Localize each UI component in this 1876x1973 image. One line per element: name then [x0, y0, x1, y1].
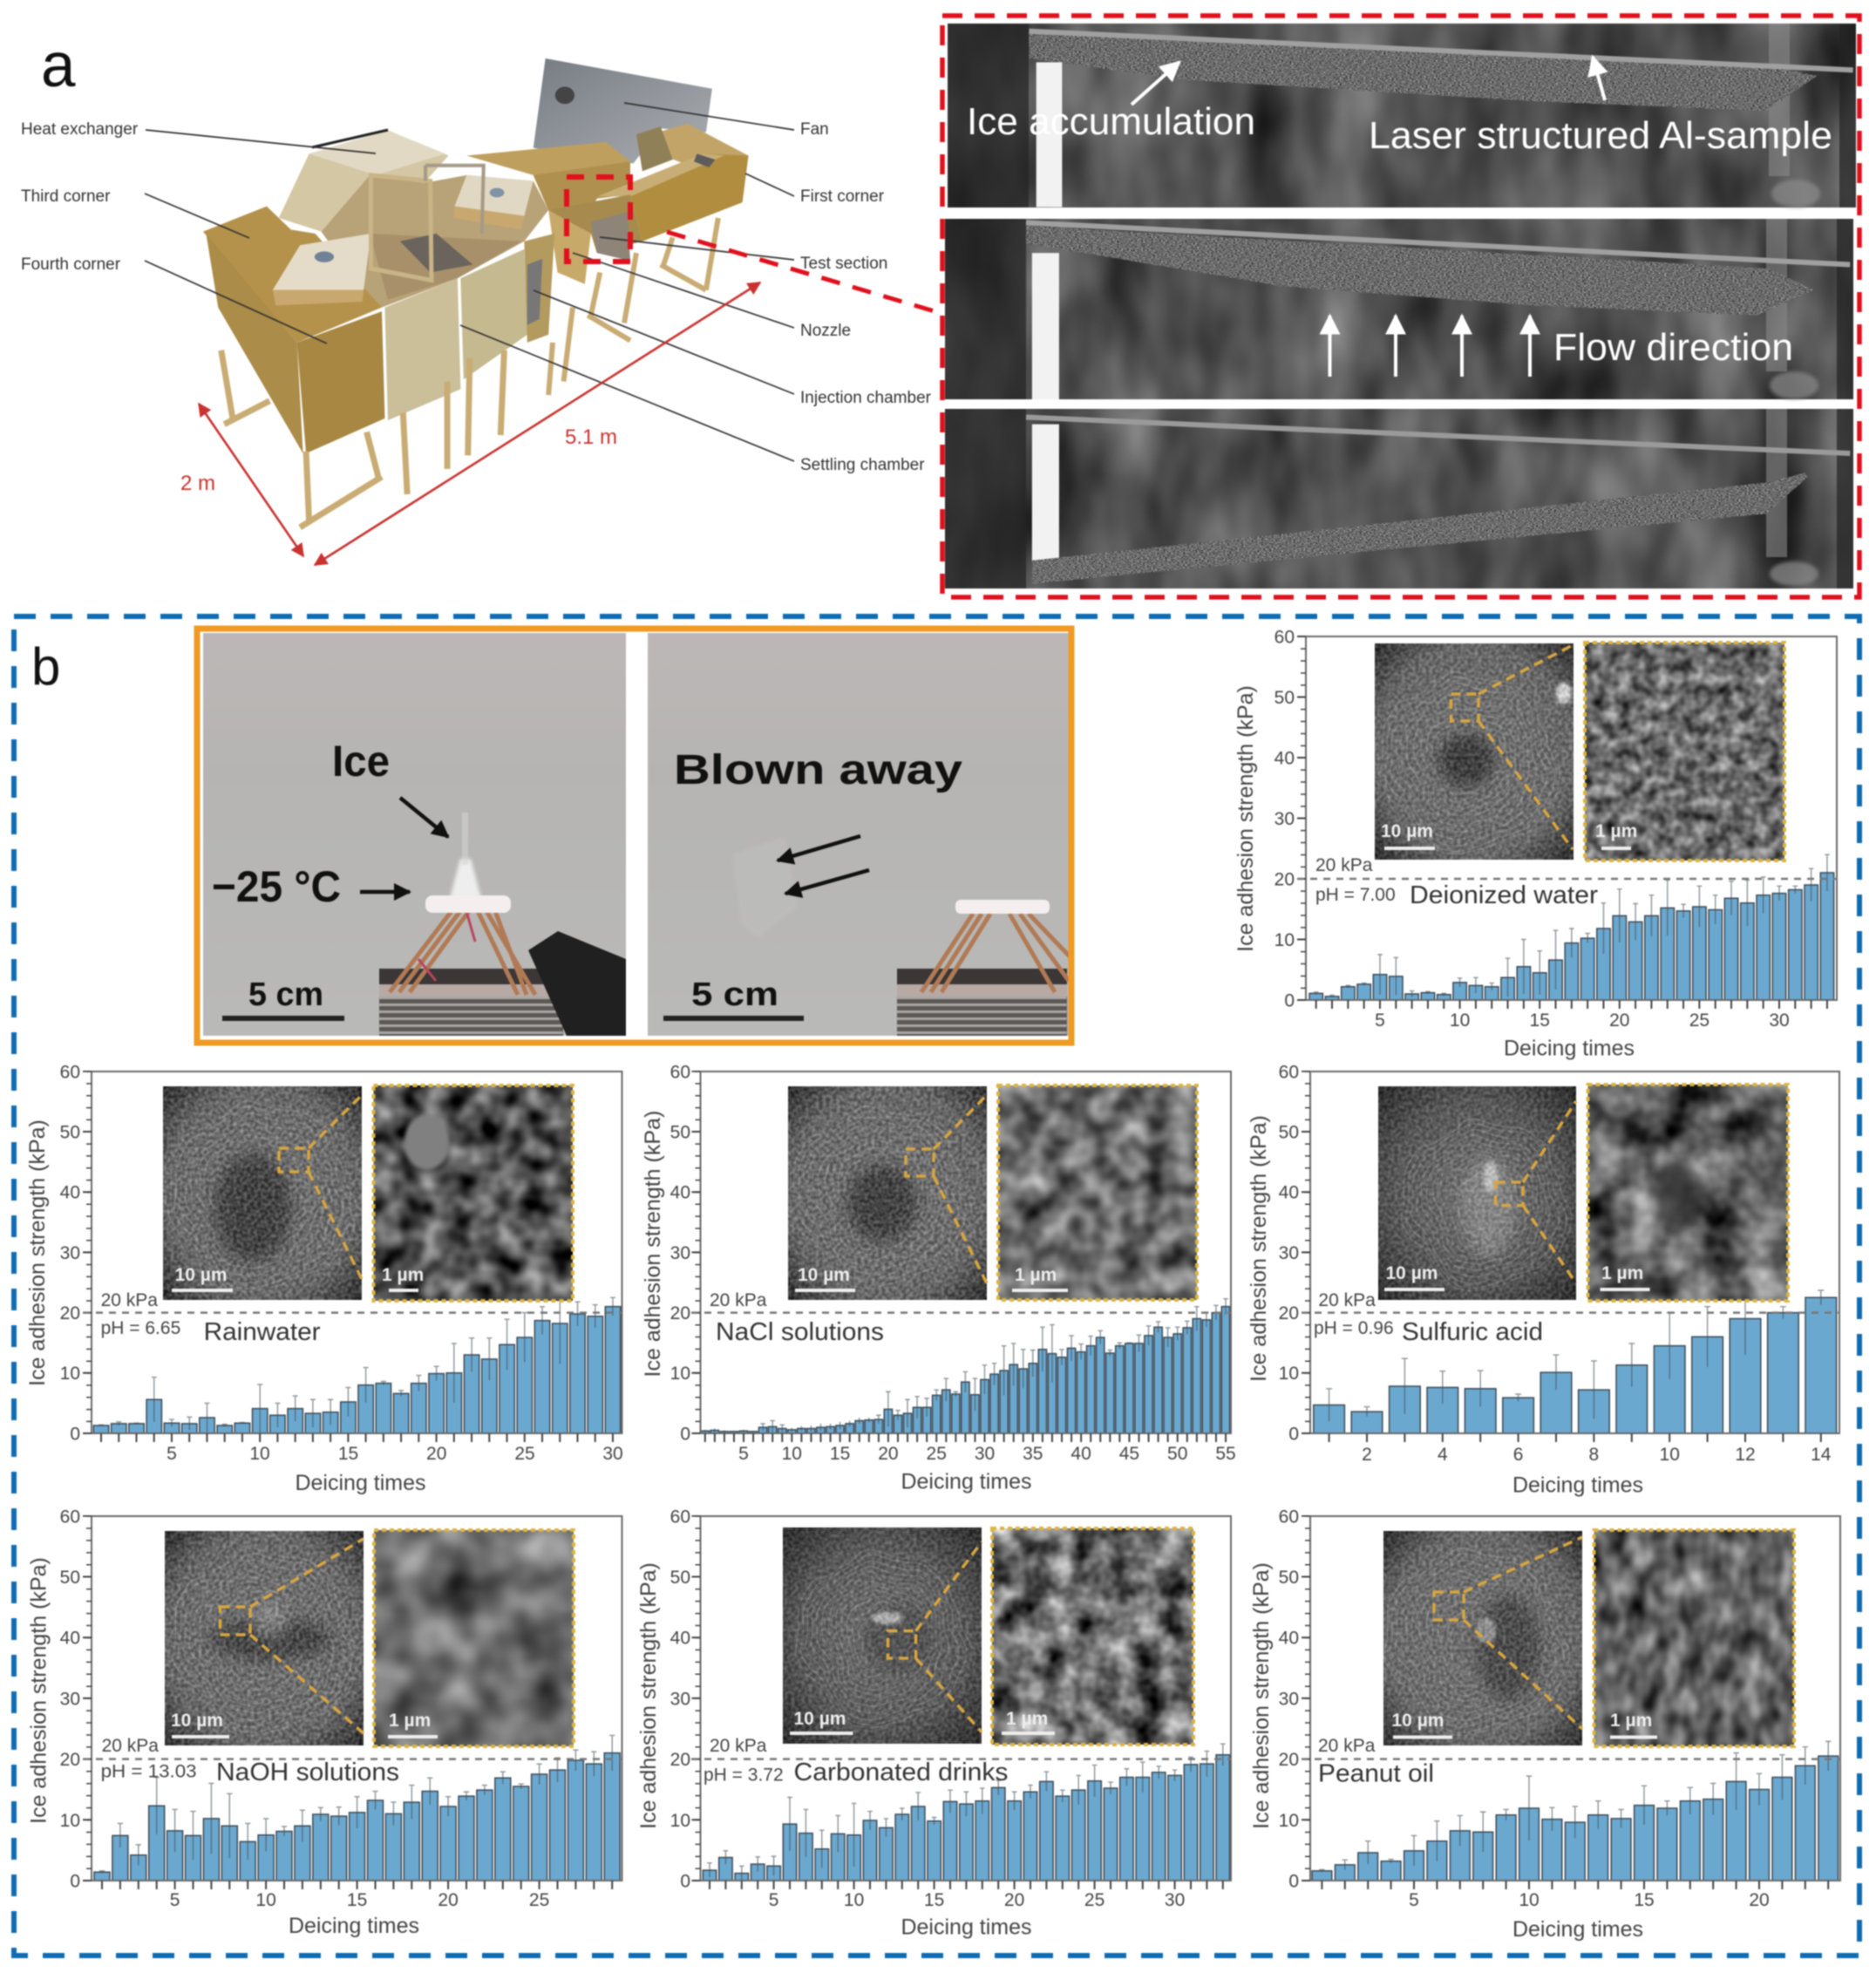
x tick labels: [1375, 1010, 1790, 1031]
x tick labels: 40: [1071, 1444, 1091, 1464]
y tick labels: 10: [1274, 930, 1295, 950]
annotations: pH = 3.72: [704, 1765, 784, 1786]
SEM overview: [783, 1527, 982, 1744]
x tick labels: [769, 1890, 1185, 1910]
annotations: Peanut oil: [1318, 1760, 1434, 1788]
panel: flow photographs: [945, 24, 1856, 588]
x tick labels: 10: [844, 1890, 864, 1910]
SEM detail: 1 µm: [1015, 1265, 1057, 1285]
SEM detail: [992, 1528, 1193, 1745]
component labels right: Settling chamber: [800, 456, 925, 474]
axes: [691, 1071, 1231, 1438]
axis titles: Ice adhesion strength (kPa): [1247, 1115, 1271, 1382]
SEM detail: [373, 1085, 573, 1301]
x tick labels: 10: [1519, 1890, 1540, 1910]
component labels right: [800, 120, 932, 474]
SEM detail: 1 µm: [382, 1265, 424, 1285]
SEM detail: 1 µm: [1610, 1711, 1652, 1731]
annotations: NaCl solutions: [716, 1318, 884, 1346]
x tick labels: 20: [1749, 1890, 1770, 1910]
label: Ice: Ice: [332, 737, 390, 786]
axis titles: Ice adhesion strength (kPa): [641, 1111, 665, 1377]
axes: [83, 1515, 622, 1885]
SEM overview: 10 µm: [171, 1711, 223, 1731]
SEM detail: [1588, 1085, 1788, 1301]
axis titles: [25, 1119, 426, 1495]
arrow: 2 m dimension: [199, 404, 303, 556]
x tick labels: 15: [1634, 1890, 1655, 1910]
y tick labels: [60, 1507, 80, 1892]
x tick labels: 30: [1165, 1890, 1185, 1910]
SEM overview: [788, 1086, 987, 1300]
y tick labels: [1279, 1507, 1299, 1892]
y tick labels: 40: [60, 1629, 80, 1649]
y tick labels: 10: [60, 1811, 80, 1831]
bars: [703, 1744, 1230, 1881]
axis titles: Deicing times: [1504, 1036, 1635, 1060]
annotations: Deionized water: [1410, 881, 1598, 909]
annotations: [1314, 1290, 1543, 1346]
ice spike: [450, 813, 481, 898]
axis titles: [1249, 1562, 1643, 1942]
x tick labels: 20: [878, 1444, 899, 1464]
illustration: wind tunnel: [203, 58, 749, 527]
annotations: [710, 1290, 884, 1346]
axis titles: Deicing times: [901, 1470, 1032, 1494]
x tick labels: 25: [514, 1444, 535, 1464]
x tick labels: 20: [1004, 1890, 1024, 1910]
axis titles: Ice adhesion strength (kPa): [1234, 685, 1258, 952]
x tick labels: 8: [1589, 1445, 1599, 1465]
dimension label 2 m: 2 m: [180, 472, 215, 495]
label: ice accumulation: Ice accumulation: [967, 100, 1255, 143]
annotations: 20 kPa: [1315, 855, 1373, 875]
x tick labels: 15: [338, 1444, 358, 1464]
SEM detail: 1 µm: [1006, 1709, 1048, 1729]
y tick labels: 50: [670, 1568, 690, 1588]
x tick labels: 30: [602, 1444, 623, 1464]
y tick labels: [670, 1062, 690, 1444]
y tick labels: 60: [1279, 1507, 1299, 1527]
label: temperature: −25 °C: [212, 862, 341, 911]
heat sink left: [379, 895, 626, 1036]
SEM detail: 1 µm: [1595, 821, 1637, 841]
x tick labels: 55: [1215, 1444, 1236, 1464]
chart: Sulfuric acid: [1247, 1062, 1839, 1498]
zoom frame: red dashed: [942, 16, 1859, 597]
y tick labels: 30: [670, 1690, 690, 1709]
leader lines: [145, 103, 794, 461]
bars: [1312, 1741, 1839, 1881]
y tick labels: 60: [670, 1062, 690, 1083]
component labels left: Fourth corner: [21, 255, 121, 274]
bars: [1309, 854, 1834, 1000]
arrow: ice accumulation: [1132, 62, 1179, 105]
x tick labels: 25: [529, 1890, 549, 1910]
axis titles: Deicing times: [1512, 1917, 1643, 1942]
arrow: laser sample: [1593, 57, 1605, 100]
component labels right: Test section: [800, 255, 887, 273]
panel label b: b: [31, 637, 60, 696]
component labels left: Third corner: [21, 187, 111, 206]
y tick labels: 40: [670, 1629, 690, 1649]
x tick labels: [738, 1444, 1236, 1464]
x tick labels: [170, 1890, 549, 1910]
x tick labels: 25: [927, 1444, 947, 1464]
axes: [691, 1515, 1231, 1885]
y tick labels: 50: [1279, 1568, 1299, 1588]
annotations: pH = 0.96: [1314, 1318, 1394, 1338]
annotations: NaOH solutions: [216, 1759, 399, 1786]
y tick labels: 10: [670, 1811, 690, 1831]
x tick labels: 20: [426, 1444, 446, 1464]
y tick labels: 10: [1279, 1364, 1299, 1384]
annotations: [101, 1290, 321, 1346]
scale right: [663, 976, 804, 1021]
x tick labels: 20: [1609, 1010, 1629, 1031]
annotations: [1318, 1736, 1434, 1788]
y tick labels: 30: [60, 1243, 80, 1263]
annotations: pH = 6.65: [101, 1318, 180, 1338]
x tick labels: 35: [1023, 1444, 1043, 1464]
x tick labels: 25: [1084, 1890, 1105, 1910]
x tick labels: 25: [1689, 1010, 1709, 1031]
SEM detail: 1 µm: [389, 1711, 431, 1731]
x tick labels: 10: [782, 1444, 802, 1464]
y tick labels: 50: [1274, 688, 1295, 708]
y tick labels: 50: [60, 1568, 80, 1588]
x tick labels: [1362, 1445, 1832, 1465]
axes: [1302, 1071, 1839, 1438]
arrows: flow direction: [1330, 316, 1530, 377]
y tick labels: 40: [670, 1183, 690, 1203]
label: Blown away: Blown away: [674, 747, 962, 793]
SEM detail: [1594, 1530, 1794, 1746]
arrow: to ice: [400, 798, 448, 837]
y tick labels: 20: [1279, 1303, 1299, 1323]
y tick labels: 0: [1288, 1871, 1299, 1892]
bars: [1314, 1282, 1837, 1433]
y tick labels: 30: [1279, 1690, 1299, 1709]
heat sink right: [897, 900, 1071, 1036]
panel b frame: blue dashed: [14, 616, 1859, 1956]
annotations: [1315, 855, 1598, 909]
x tick labels: 50: [1167, 1444, 1187, 1464]
chart: NaCl solutions: [641, 1062, 1236, 1494]
faint ice trail: [732, 837, 798, 937]
SEM overview: 10 µm: [793, 1709, 846, 1729]
y tick labels: [670, 1507, 690, 1892]
arrow: 5.1 m dimension: [315, 282, 760, 565]
component labels right: Nozzle: [800, 322, 851, 340]
axis titles: Ice adhesion strength (kPa): [1249, 1562, 1274, 1829]
x tick labels: 30: [975, 1444, 995, 1464]
SEM overview: 10 µm: [1391, 1711, 1444, 1731]
y tick labels: 0: [680, 1871, 690, 1892]
annotations: pH = 13.03: [101, 1762, 197, 1782]
x tick labels: 45: [1119, 1444, 1139, 1464]
axis titles: Deicing times: [1512, 1473, 1643, 1498]
label: laser structured sample: Laser structured Al-sample: [1369, 114, 1832, 157]
annotations: 20 kPa: [102, 1736, 159, 1756]
x tick labels: [167, 1444, 623, 1464]
photo 2: [945, 219, 1853, 399]
annotations: Rainwater: [204, 1318, 321, 1346]
x tick labels: 15: [347, 1890, 367, 1910]
component labels right: First corner: [800, 187, 885, 206]
component labels right: Injection chamber: [800, 389, 932, 407]
x tick labels: 5: [1409, 1890, 1419, 1910]
heat exchanger bar: [312, 130, 388, 147]
photo 3: [945, 409, 1853, 588]
y tick labels: 0: [70, 1425, 80, 1444]
SEM overview: 10 µm: [798, 1265, 850, 1285]
y tick labels: 30: [670, 1243, 690, 1263]
test section highlight box: [567, 177, 630, 262]
dimension label 5.1 m: 5.1 m: [565, 425, 617, 449]
bars: [94, 1735, 620, 1881]
annotations: Sulfuric acid: [1402, 1318, 1543, 1346]
SEM detail: [998, 1085, 1197, 1300]
axis titles: [1234, 685, 1635, 1060]
y tick labels: 0: [1288, 1425, 1299, 1444]
x tick labels: 20: [438, 1890, 459, 1910]
axis titles: Ice adhesion strength (kPa): [636, 1562, 661, 1829]
x tick labels: 5: [738, 1444, 749, 1464]
chart: NaOH solutions: [26, 1507, 622, 1938]
y tick labels: 0: [70, 1871, 80, 1892]
y tick labels: 10: [670, 1364, 690, 1384]
x tick labels: 10: [249, 1444, 270, 1464]
axis titles: Deicing times: [289, 1914, 419, 1938]
axis titles: [636, 1562, 1032, 1940]
SEM overview: [163, 1086, 362, 1300]
y tick labels: 10: [1279, 1811, 1299, 1831]
axis titles: Ice adhesion strength (kPa): [26, 1557, 51, 1824]
scale left: 5 cm: [248, 976, 323, 1013]
y tick labels: 40: [1274, 748, 1295, 769]
x tick labels: 10: [1660, 1445, 1680, 1465]
y tick labels: [60, 1062, 80, 1444]
bars: [701, 1299, 1230, 1433]
component labels left: [21, 120, 139, 274]
x tick labels: 5: [769, 1890, 778, 1910]
y tick labels: 30: [1274, 809, 1295, 829]
axis titles: [1247, 1115, 1643, 1498]
axes: [1302, 1515, 1840, 1885]
component labels right: Fan: [800, 120, 829, 139]
y tick labels: 60: [670, 1507, 690, 1527]
axis titles: Deicing times: [901, 1915, 1032, 1940]
annotations: Carbonated drinks: [793, 1759, 1008, 1786]
x tick labels: 10: [1450, 1010, 1470, 1031]
x tick labels: [1409, 1890, 1770, 1910]
y tick labels: 20: [670, 1750, 690, 1770]
y tick labels: 50: [670, 1123, 690, 1142]
x tick labels: 5: [167, 1444, 177, 1464]
axis titles: Ice adhesion strength (kPa): [25, 1119, 50, 1386]
y tick labels: 50: [60, 1123, 80, 1142]
SEM overview: 10 µm: [1386, 1263, 1438, 1283]
y tick labels: 20: [670, 1303, 690, 1323]
x tick labels: 5: [1375, 1010, 1385, 1031]
x tick labels: 14: [1811, 1445, 1832, 1465]
annotations: [101, 1736, 399, 1786]
annotations: pH = 7.00: [1315, 885, 1396, 905]
x tick labels: 30: [1769, 1010, 1790, 1031]
SEM overview: 10 µm: [175, 1265, 228, 1285]
y tick labels: 20: [60, 1303, 80, 1323]
photo 1: [948, 24, 1856, 208]
y tick labels: 60: [60, 1507, 80, 1527]
SEM detail: [1585, 643, 1784, 861]
x tick labels: 15: [924, 1890, 944, 1910]
annotations: 20 kPa: [101, 1290, 158, 1310]
axes: [83, 1071, 622, 1438]
x tick labels: 12: [1735, 1445, 1756, 1465]
chart: Peanut oil: [1249, 1507, 1840, 1942]
scale left: [222, 976, 344, 1021]
y tick labels: 40: [1279, 1629, 1299, 1649]
x tick labels: 15: [830, 1444, 850, 1464]
bars: [93, 1297, 621, 1433]
annotations: 20 kPa: [1318, 1290, 1376, 1310]
SEM detail: [374, 1530, 574, 1746]
axis titles: Deicing times: [295, 1471, 426, 1495]
annotations: 20 kPa: [710, 1290, 767, 1310]
x tick labels: 10: [255, 1890, 276, 1910]
orange photo frame: [197, 629, 1071, 1043]
annotations: 20 kPa: [710, 1736, 767, 1756]
panel: deicing photographs: [203, 633, 1071, 1036]
component labels left: Heat exchanger: [21, 120, 139, 139]
y tick labels: 50: [1279, 1123, 1299, 1142]
scale right: 5 cm: [691, 976, 778, 1013]
SEM overview: [1383, 1531, 1582, 1745]
arrows: blown away: [778, 836, 869, 894]
x tick labels: 4: [1438, 1445, 1448, 1465]
annotations: [704, 1736, 1008, 1786]
label: flow direction: Flow direction: [1553, 326, 1793, 369]
x tick labels: 6: [1513, 1445, 1523, 1465]
y tick labels: 20: [60, 1750, 80, 1770]
y tick labels: 60: [1279, 1062, 1299, 1083]
SEM overview: [1375, 643, 1574, 860]
chart: Rainwater: [25, 1062, 623, 1495]
SEM overview: [1378, 1086, 1576, 1300]
y tick labels: 0: [680, 1425, 690, 1444]
x tick labels: 5: [170, 1890, 180, 1910]
y tick labels: 10: [60, 1364, 80, 1384]
y tick labels: 20: [1274, 870, 1295, 889]
y tick labels: [1274, 628, 1295, 1011]
x tick labels: 2: [1362, 1445, 1372, 1465]
y tick labels: 0: [1284, 990, 1295, 1011]
arrow: to base: [360, 890, 410, 894]
y tick labels: 30: [60, 1690, 80, 1709]
SEM overview: [165, 1531, 364, 1745]
SEM overview: 10 µm: [1381, 821, 1433, 841]
y tick labels: 40: [60, 1183, 80, 1203]
y tick labels: [1279, 1062, 1299, 1444]
y tick labels: 40: [1279, 1183, 1299, 1203]
y tick labels: 60: [1274, 628, 1295, 647]
axis titles: [26, 1557, 419, 1938]
y tick labels: 60: [60, 1062, 80, 1083]
SEM detail: 1 µm: [1601, 1263, 1643, 1283]
y tick labels: 20: [1279, 1750, 1299, 1770]
panel label a: a: [41, 31, 76, 100]
annotations: 20 kPa: [1318, 1736, 1376, 1756]
zoom connector line: [667, 232, 935, 311]
y tick labels: 30: [1279, 1243, 1299, 1263]
chart: Carbonated drinks: [636, 1507, 1231, 1940]
axes: [1297, 636, 1837, 1004]
axis titles: [641, 1111, 1032, 1494]
chart: Deionized water: [1234, 628, 1837, 1060]
x tick labels: 15: [1530, 1010, 1550, 1031]
